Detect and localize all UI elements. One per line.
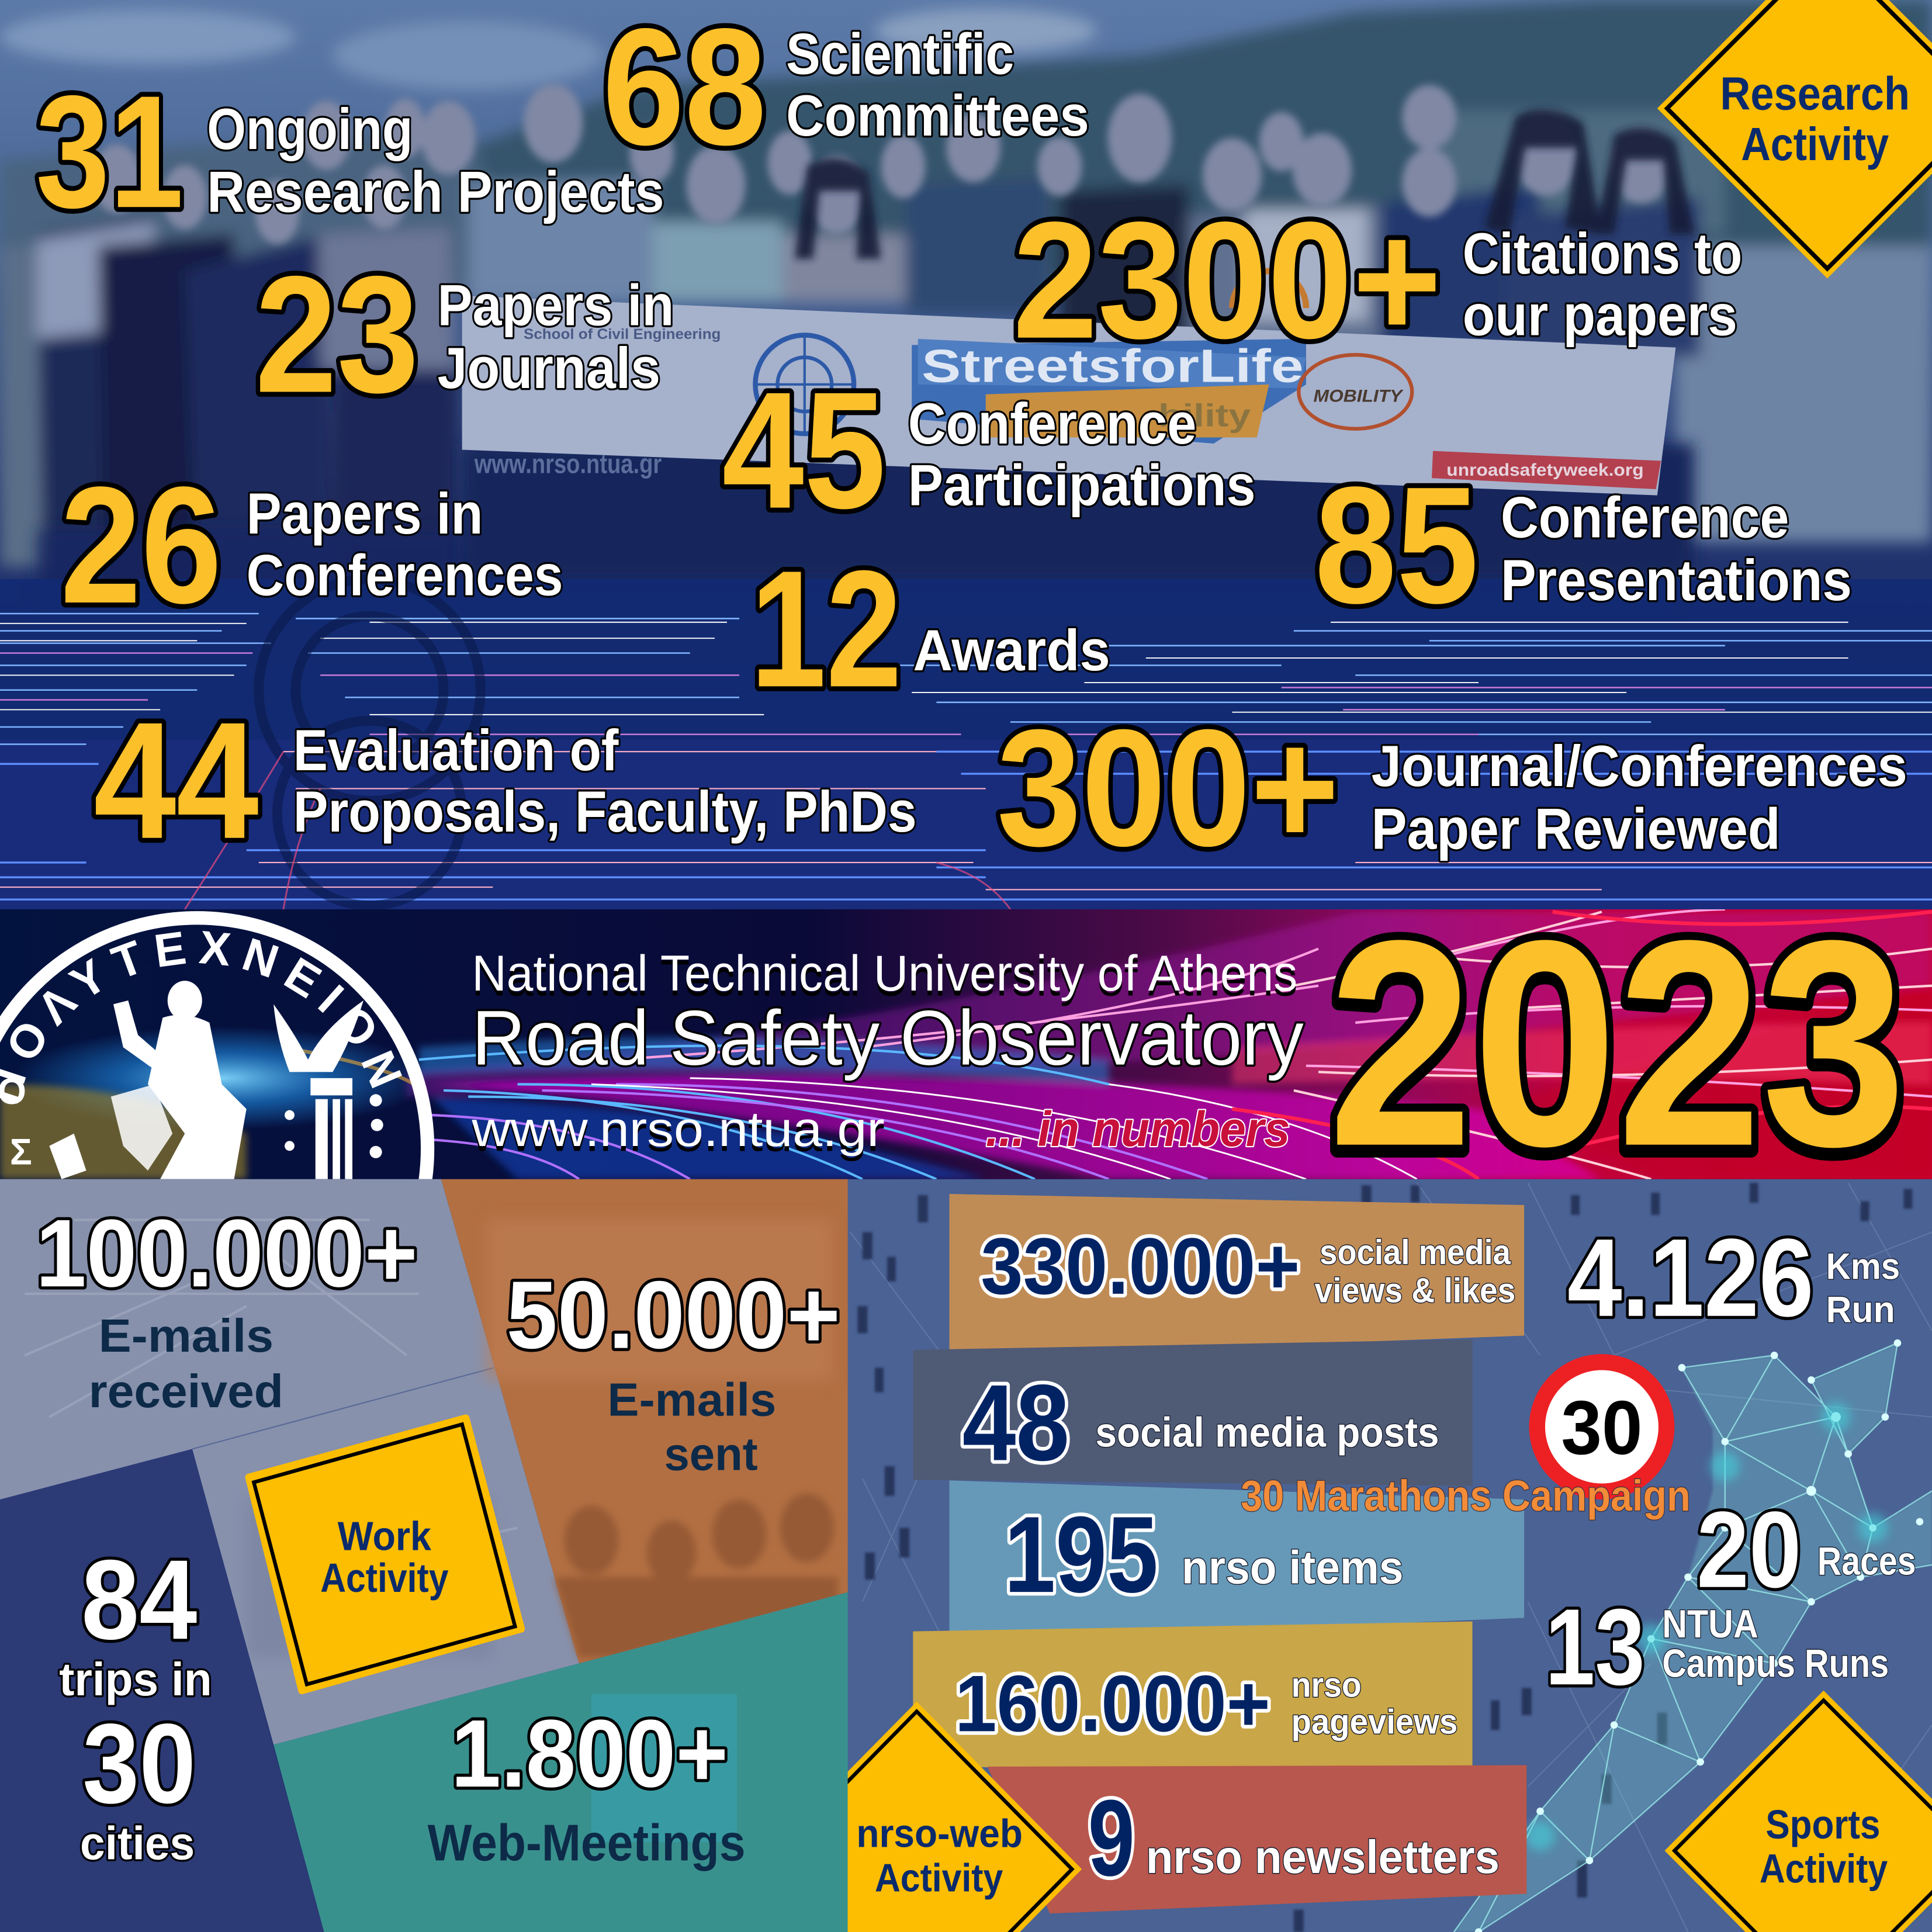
stat: 68 scientific committees — [603, 0, 1089, 180]
stat: 20 races: Races — [1817, 1540, 1916, 1584]
bar: nrso pageviews: nrso — [1292, 1666, 1362, 1704]
logo: NTUA seal: Σ — [10, 1131, 32, 1172]
tile: e-mails sent: 50.000+ — [507, 1261, 840, 1369]
tile: trips: trips in — [59, 1653, 212, 1705]
stat: 4.126 kms run: 4.126 — [1567, 1216, 1814, 1340]
title: National Technical University of Athens: National Technical University of Athens — [472, 946, 1297, 1002]
background: crowd network — [848, 1179, 1932, 1932]
stat: 45 conference participations: 45 — [722, 358, 886, 543]
stat: 26 papers in conferences: Papers in — [247, 481, 483, 546]
bar: nrso items — [950, 1480, 1524, 1642]
stat: 31 ongoing research projects: Research Projects — [207, 160, 664, 224]
stat: 300+ papers reviewed: Journal/Conferences — [1372, 733, 1907, 798]
bar: social media views: 330.000+ — [981, 1222, 1300, 1311]
stat: 85 conference presentations — [1315, 452, 1852, 638]
stat: 12 awards: Awards — [913, 618, 1110, 683]
tile: e-mails sent: E-mails — [607, 1373, 776, 1426]
stat: 26 papers in conferences: 26 — [60, 452, 222, 638]
hair — [795, 109, 1694, 259]
bar: nrso newsletters: 9 — [1088, 1778, 1135, 1899]
stat: 45 conference participations — [722, 358, 1255, 543]
website: www.nrso.ntua.gr — [471, 1102, 885, 1157]
stat: 85 conference presentations: 85 — [1315, 452, 1479, 638]
stat: 20 races: 20 — [1696, 1490, 1802, 1611]
bar: nrso pageviews: 160.000+ — [955, 1659, 1270, 1749]
left people clothing — [37, 216, 160, 591]
panel: work activity — [0, 1179, 849, 1932]
tile: trips: 30 — [82, 1701, 196, 1827]
stat: 13 NTUA campus runs — [1545, 1587, 1889, 1708]
tile: e-mails received: E-mails — [99, 1309, 273, 1362]
sign: nrso-web activity — [752, 1702, 1082, 1932]
bar: nrso pageviews — [913, 1622, 1473, 1786]
stat: 23 papers in journals: Journals — [437, 335, 660, 400]
tile: e-mails received: received — [89, 1365, 283, 1417]
background: team photo: StreetsforLife — [922, 340, 1304, 392]
panel: research activity — [0, 0, 1932, 909]
heads — [92, 84, 1671, 244]
background: team photo: www.nrso.ntua.gr — [474, 449, 662, 479]
stat: 13 NTUA campus runs: NTUA — [1662, 1602, 1758, 1646]
bar: nrso items: 195 — [1004, 1494, 1158, 1615]
stat: 13 NTUA campus runs: 13 — [1545, 1587, 1645, 1708]
bar: social media posts — [913, 1339, 1473, 1486]
sign: sports activity: Activity — [1760, 1846, 1888, 1892]
stat: 20 races — [1696, 1490, 1916, 1611]
logo: NTUA seal — [0, 911, 435, 1179]
background: light-streak highway — [0, 579, 1932, 909]
stat: 44 evaluation of proposals — [94, 688, 917, 874]
lower dark legs — [37, 530, 1675, 616]
icon: speed limit 30 sign — [1529, 1354, 1674, 1500]
stat: 23 papers in journals — [255, 241, 674, 427]
stat: 68 scientific committees: Committees — [786, 83, 1089, 148]
stat: 31 ongoing research projects: 31 — [36, 63, 183, 241]
bar: nrso items: nrso items — [1182, 1540, 1403, 1593]
bar: nrso newsletters: nrso newsletters — [1146, 1830, 1500, 1883]
tile: e-mails sent: sent — [664, 1427, 758, 1480]
bar: social media posts: 48 — [962, 1362, 1069, 1483]
tile: e-mails received: 100.000+ — [36, 1199, 418, 1307]
stat: 44 evaluation of proposals: 44 — [94, 688, 259, 874]
bar: nrso pageviews: pageviews — [1292, 1703, 1457, 1741]
background: team photo: School of Civil Engineering — [524, 326, 721, 342]
illustration: network runner — [1454, 1339, 1932, 1932]
tagline: in numbers: ... in numbers — [986, 1102, 1290, 1157]
stat: 300+ papers reviewed: 300+ — [997, 695, 1339, 881]
tile: trips — [0, 1449, 324, 1932]
stat: 13 NTUA campus runs: Campus Runs — [1662, 1642, 1889, 1686]
banner — [462, 296, 1675, 496]
stat: 85 conference presentations: Presentations — [1501, 548, 1852, 612]
bar: nrso newsletters — [988, 1765, 1526, 1913]
icon: speed limit 30 sign: 30 — [1561, 1385, 1643, 1470]
dots — [370, 1094, 382, 1106]
torch — [273, 1000, 363, 1072]
background: team photo: bility — [1158, 397, 1251, 434]
stat: 85 conference presentations: Conference — [1501, 484, 1789, 549]
sign: work activity — [249, 1418, 521, 1691]
panel: web and sports activity — [752, 1179, 1932, 1932]
background: team photo: MOBILITY — [1314, 386, 1404, 406]
stat: 31 ongoing research projects — [36, 63, 664, 241]
tile: web-meetings: Web-Meetings — [428, 1814, 746, 1872]
sign: work activity: Activity — [320, 1555, 449, 1601]
stat: 26 papers in conferences — [60, 452, 563, 638]
figure — [168, 981, 202, 1020]
stat: 44 evaluation of proposals: Evaluation of — [293, 718, 619, 783]
tile: trips: 84 — [81, 1536, 197, 1663]
sign: nrso-web activity: Activity — [875, 1856, 1003, 1900]
tile: e-mails sent — [441, 1179, 849, 1663]
tile: web-meetings: 1.800+ — [451, 1699, 728, 1807]
stat: 2300+ citations — [1013, 188, 1742, 373]
sign: nrso-web activity: nrso-web — [856, 1812, 1023, 1856]
stat: 68 scientific committees: Scientific — [786, 22, 1014, 86]
stat: 2300+ citations: our papers — [1463, 282, 1737, 347]
bar: social media views — [950, 1194, 1524, 1358]
background: team photo: unroadsafetyweek.org — [1446, 461, 1644, 480]
sign: research activity: Activity — [1741, 117, 1889, 170]
sign: work activity: Work — [338, 1513, 431, 1559]
tile: e-mails received — [0, 1179, 579, 1745]
stat: 44 evaluation of proposals: Proposals, Faculty, PhDs — [293, 779, 917, 844]
background: team photo — [0, 0, 1932, 579]
bar: social media views: views & likes — [1315, 1272, 1515, 1310]
stat: 23 papers in journals: 23 — [255, 241, 419, 427]
stat: 31 ongoing research projects: Ongoing — [207, 96, 413, 161]
stat: 300+ papers reviewed: Paper Reviewed — [1372, 797, 1781, 861]
stat: 26 papers in conferences: Conferences — [247, 542, 563, 607]
bar: social media posts: social media posts — [1095, 1409, 1439, 1456]
stat: 12 awards: 12 — [750, 536, 902, 722]
sign: sports activity — [1664, 1691, 1932, 1932]
stat: 45 conference participations: Participations — [908, 452, 1255, 517]
bar: social media views: social media — [1320, 1233, 1511, 1272]
sign: sports activity: Sports — [1765, 1802, 1880, 1847]
stat: 4.126 kms run: Kms — [1826, 1247, 1900, 1287]
stat: 23 papers in journals: Papers in — [437, 273, 674, 338]
stat: 2300+ citations: 2300+ — [1013, 188, 1442, 373]
sign: research activity — [1657, 0, 1932, 279]
stat: 45 conference participations: Conference — [908, 391, 1196, 456]
stat: 12 awards — [750, 536, 1110, 722]
caption: 30 marathons campaign: 30 Marathons Campaign — [1241, 1471, 1691, 1520]
tile: web-meetings — [273, 1592, 849, 1932]
background: light streaks — [0, 909, 1932, 1179]
title: Road Safety Observatory: Road Safety Observatory — [472, 995, 1304, 1082]
sign: research activity: Research — [1720, 67, 1910, 120]
stat: 2300+ citations: Citations to — [1463, 221, 1742, 286]
panel: title band — [0, 909, 1932, 1179]
stat: 300+ papers reviewed — [997, 695, 1907, 881]
stat: 4.126 kms run: Run — [1826, 1289, 1895, 1330]
tile: trips: cities — [80, 1817, 195, 1869]
